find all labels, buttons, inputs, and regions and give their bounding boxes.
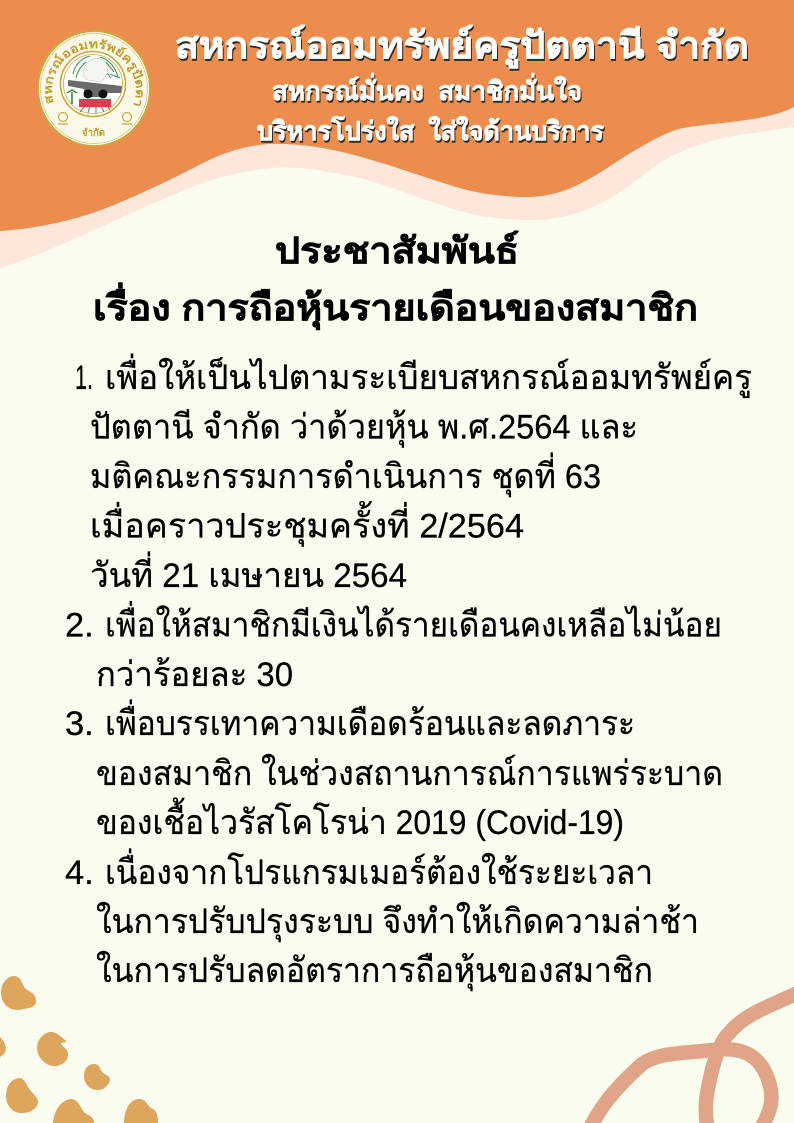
item 3: 3.: [65, 705, 94, 743]
item 3: เพื่อบรรเทาความเดือดร้อนและลดภาระ: [105, 699, 635, 743]
logo: hill shape: [83, 58, 108, 82]
slogan line 1: สหกรณ์มั่นคง สมาชิกมั่นใจ: [272, 72, 582, 106]
header wave: orange: [0, 0, 794, 231]
heading: monthly share holding: เรื่อง การถือหุ้นรายเดือนของสมาชิก: [93, 282, 698, 331]
item 4: ในการปรับลดอัตราการถือหุ้นของสมาชิก: [96, 951, 653, 991]
item 3: ของสมาชิก ในช่วงสถานการณ์การแพร่ระบาด: [96, 754, 723, 793]
item 4: 4.: [65, 854, 94, 892]
logo: cannon: [68, 80, 122, 97]
item 4: ในการปรับปรุงระบบ จึงทำให้เกิดความล่าช้า: [96, 902, 699, 942]
item 4: [65, 848, 699, 991]
logo: cooperative seal: [37, 30, 151, 147]
item 2: กว่าร้อยละ 30: [96, 656, 293, 694]
header wave: light band: [0, 0, 794, 268]
item 3: [65, 699, 723, 842]
item 2: เพื่อให้สมาชิกมีเงินได้รายเดือนคงเหลือไม่น้อย: [105, 600, 722, 644]
item 1: เมื่อคราวประชุมครั้งที่ 2/2564: [90, 500, 524, 546]
logo: ring text: [52, 48, 136, 103]
item 1: ปัตตานี จำกัด ว่าด้วยหุ้น พ.ศ.2564 และ: [90, 408, 638, 448]
item 1: [75, 353, 752, 595]
item 1: มติคณะกรรมการดำเนินการ ชุดที่ 63: [90, 452, 601, 497]
logo: side emblems: [58, 112, 132, 124]
heading: public relations: ประชาสัมพันธ์: [275, 230, 519, 271]
logo: red base: [79, 99, 111, 107]
item 2: 2.: [65, 606, 94, 644]
slogan line 2: บริหารโปร่งใส ใส่ใจด้านบริการ: [257, 115, 604, 146]
item 4: เนื่องจากโปรแกรมเมอร์ต้องใช้ระยะเวลา: [105, 848, 653, 892]
item 2: [65, 600, 722, 694]
decoration: blobs bottom left: [0, 976, 158, 1123]
logo: hill and green rays: [73, 56, 120, 113]
logo: bottom text: จำกัด: [82, 127, 105, 139]
item 3: ของเชื้อไวรัสโคโรน่า 2019 (Covid-19): [96, 797, 624, 842]
item 1: วันที่ 21 เมษายน 2564: [90, 551, 407, 595]
decoration: looped stroke bottom right: [590, 992, 794, 1123]
header title: สหกรณ์ออมทรัพย์ครูปัตตานี จำกัด: [175, 25, 749, 69]
logo: palm: [67, 90, 77, 104]
item 1: เพื่อให้เป็นไปตามระเบียบสหกรณ์ออมทรัพย์ครู: [105, 353, 752, 398]
item 1: 1.: [75, 359, 93, 397]
